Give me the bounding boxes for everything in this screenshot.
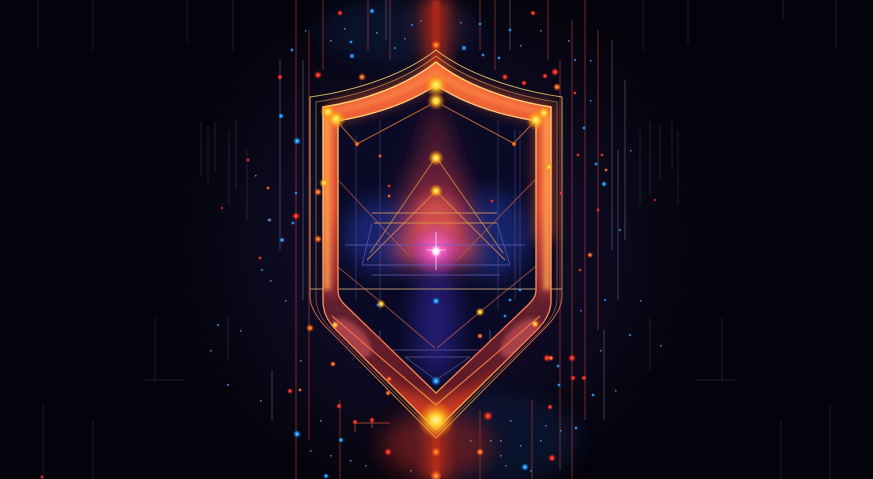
shield outer glow bbox=[330, 72, 544, 240]
central vertical beam bbox=[381, 0, 491, 479]
central glowing nodes bbox=[417, 40, 455, 479]
shoulder and side nodes bbox=[319, 104, 553, 329]
orange and red particles bbox=[40, 10, 656, 479]
small dim stars bbox=[210, 20, 662, 472]
red and grey circuit lines around the shield bbox=[272, 0, 625, 479]
geometric line work inside the shield bbox=[310, 105, 562, 380]
shield band highlights bbox=[310, 50, 562, 438]
shield interior bbox=[338, 88, 536, 392]
pink core glow bbox=[408, 222, 464, 278]
shield band bbox=[323, 62, 551, 438]
blue particles bbox=[216, 8, 632, 479]
